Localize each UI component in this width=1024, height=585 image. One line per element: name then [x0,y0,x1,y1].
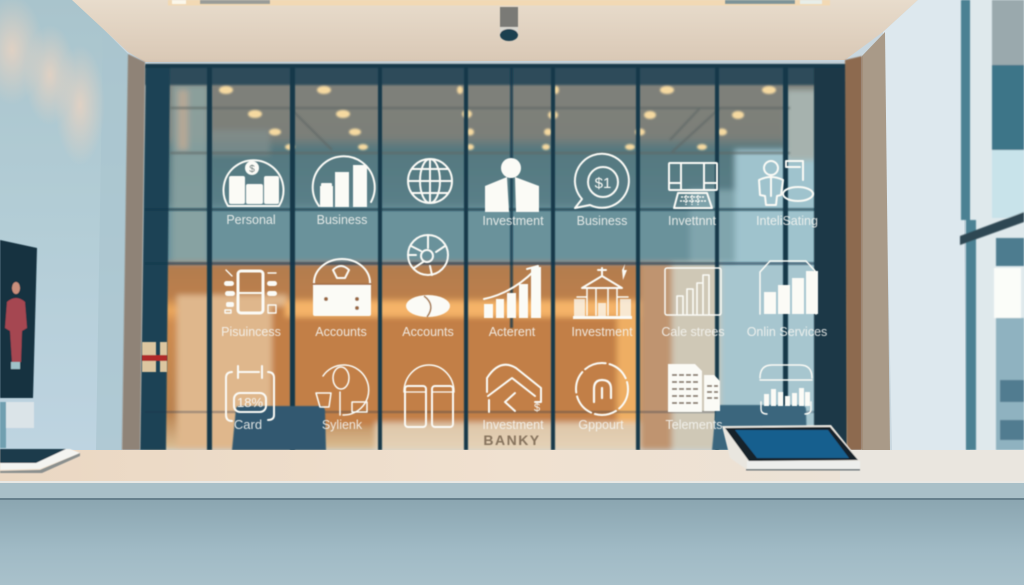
icon: business bar dome [313,156,375,227]
icon: globe [408,159,452,203]
icon: house with arrow: $ [534,402,540,414]
icon: documents [666,364,722,432]
wall light scallops [0,0,105,165]
icon: house with arrow [482,365,544,432]
ceiling security camera [500,7,518,41]
icon: online services monitor bars: Onlin Services [747,325,827,339]
icon: personal banking [224,160,284,227]
icon: accounts double oval: Accounts [402,325,454,339]
icon: accounts chest [312,259,372,339]
icon: computer with keyboard: Invettnnt [668,214,716,228]
icon: calendar card: Card [234,417,262,432]
icon: computer with keyboard [668,163,717,228]
tablet on counter, left [0,449,80,473]
icon: accounts double oval [402,295,454,339]
ceiling downlights [219,86,776,150]
icon: personal banking: Personal [226,213,276,227]
icon: business speech bubble coin: $1 [595,175,611,192]
icon: business speech bubble coin: Business [577,214,627,228]
icon: calendar card: 18% [237,395,263,410]
blue chairs behind glass [232,405,807,450]
icon: coins round [316,365,369,432]
icon: business bar dome: Business [317,213,367,227]
recessed ceiling light strip [168,0,830,6]
icon: phone with apps [221,270,281,339]
tablet on counter, right [722,425,860,470]
label: BANKY sign behind glass: BANKY [483,432,541,448]
icon: online monitor with bars [760,365,812,414]
icon: framed bar chart [661,268,725,339]
icon: twin phones under dome [404,365,454,427]
icon: at-sign circle: Gppourt [578,418,624,432]
icon: rising bar chart with arrow: Acterent [489,325,536,339]
right window with frames [960,0,1024,450]
glass header band [145,66,823,85]
icon: person with mouse: InteliSating [756,214,818,228]
icon: online services monitor bars [747,261,827,339]
icon: at-sign circle [576,363,628,432]
icon: segmented handshake circle [408,235,448,275]
glass wall with reflected office behind [122,54,862,452]
icon: calendar card [226,366,274,432]
icon: personal banking: $ [249,164,255,175]
icon: accounts chest: Accounts [315,325,367,339]
left wall poster of a person [0,240,37,448]
icon: person with mouse [756,161,818,228]
ceiling reflections [170,108,790,153]
wall door pull markers [142,342,167,372]
icon: business speech bubble coin [575,154,629,228]
wall right side panels [883,0,966,450]
icon: investment person: Investment [482,214,544,228]
icon: rising bar chart with arrow [484,266,541,339]
icon: bank building [571,264,633,339]
reception counter [0,450,1024,585]
icon: phone with apps: Pisuincess [221,325,281,339]
icon: coins round: Sylienk [322,418,363,432]
glass mullions [140,64,847,450]
side columns [122,54,862,450]
icon: investment person [482,158,544,228]
icon: documents: Telements [666,418,722,432]
icon: framed bar chart: Cale strees [661,325,725,339]
icon: bank building: Investment [571,325,633,339]
icon: house with arrow: Investment [482,418,544,432]
